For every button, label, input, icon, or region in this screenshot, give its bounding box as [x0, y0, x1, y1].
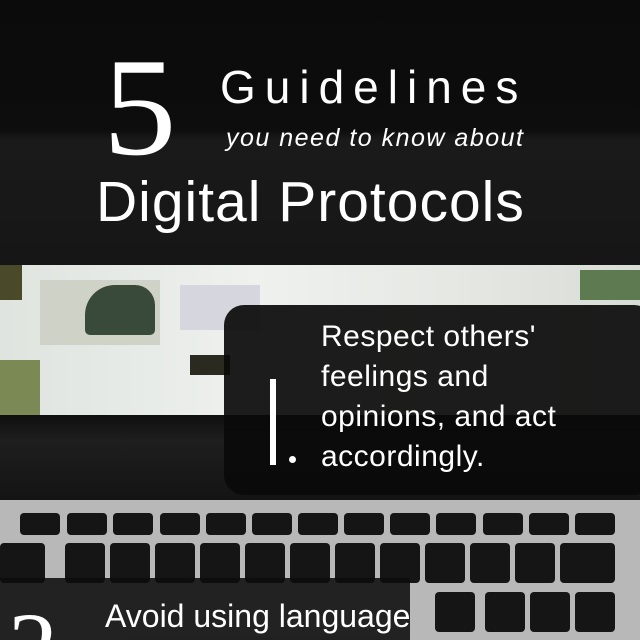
text: guideline 1: accordingly. [321, 440, 485, 473]
text: guideline 2: Avoid using language [105, 598, 410, 634]
number 1 [270, 379, 296, 465]
subheading: you need to know about [226, 124, 524, 152]
background: keyboard [0, 500, 640, 640]
heading: Guidelines: Guidelines [220, 61, 527, 113]
text: guideline 1 [321, 320, 556, 473]
card: guideline 1 [224, 305, 640, 495]
text: guideline 1: opinions, and act [321, 400, 556, 433]
text: guideline 1: Respect others' [321, 320, 536, 353]
background: dark top [0, 0, 640, 265]
background: laptop screen [0, 265, 640, 415]
title number 5: 5 [103, 30, 176, 185]
panel: bottom overlay [0, 578, 410, 640]
heading: Digital Protocols: Digital Protocols [96, 170, 525, 234]
text: guideline 1: feelings and [321, 360, 489, 393]
background: bezel [0, 415, 640, 500]
